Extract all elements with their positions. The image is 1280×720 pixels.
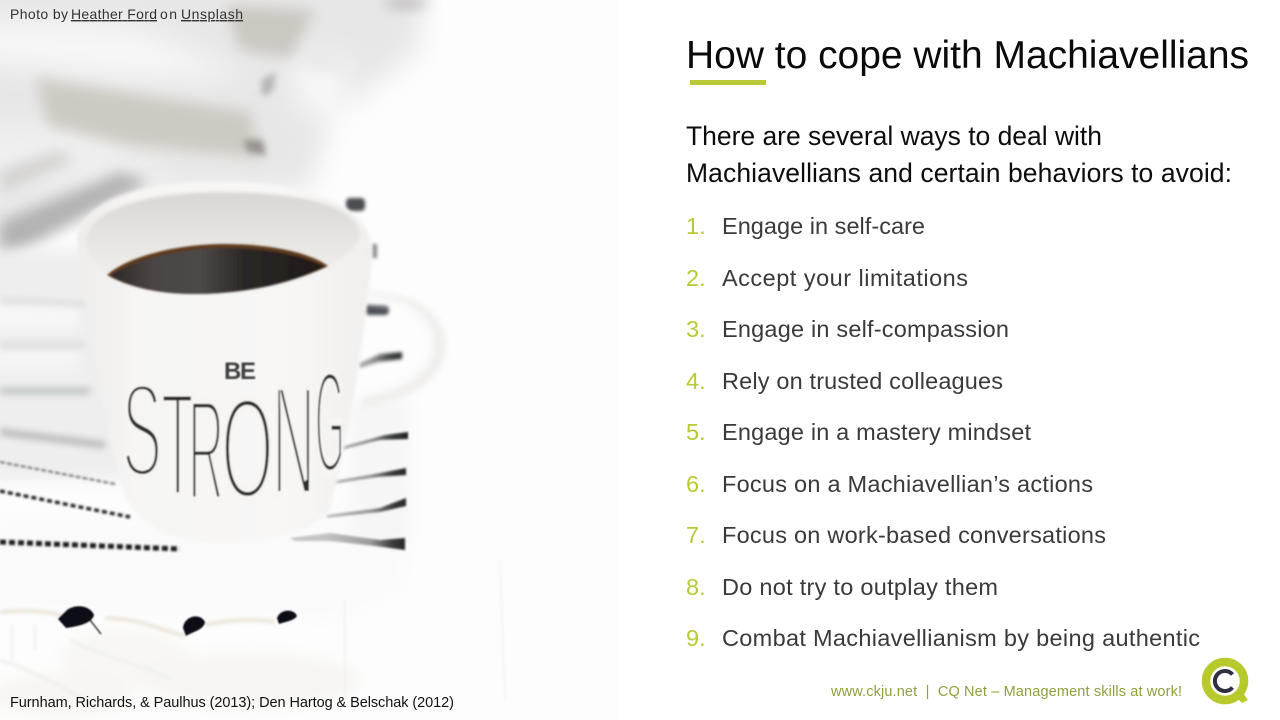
mug lettering: BE: [224, 358, 256, 385]
item 1: Engage in self-care: [722, 213, 925, 239]
table board lines: [345, 560, 505, 700]
intro text: [686, 121, 1232, 188]
photo credit: Unsplash: [181, 6, 243, 22]
item 7: 7.: [686, 522, 706, 548]
mug lettering: O: [221, 368, 274, 529]
item 8: 8.: [686, 574, 706, 600]
title: How to cope with Machiavellians: [686, 34, 1249, 77]
item 8: Do not try to outplay them: [722, 574, 998, 600]
item 5: Engage in a mastery mindset: [722, 419, 1031, 445]
item 2: 2.: [686, 265, 706, 291]
item 5: 5.: [686, 419, 706, 445]
item 6: 6.: [686, 471, 706, 497]
mug lettering: G: [315, 342, 345, 503]
item 2: Accept your limitations: [722, 265, 968, 291]
item 1: 1.: [686, 213, 706, 239]
striped knit cloth under mug: [0, 195, 410, 554]
item 9: 9.: [686, 625, 706, 651]
photo credit: [10, 6, 243, 22]
mug lettering: S: [122, 356, 162, 504]
coffee: [107, 244, 328, 294]
photo credit: Heather Ford: [71, 6, 157, 22]
photo credit: Photo by: [10, 6, 68, 22]
item 4: 4.: [686, 368, 706, 394]
intro text: There are several ways to deal with: [686, 121, 1102, 151]
mug handle: [362, 298, 440, 402]
mug lettering: T: [161, 361, 195, 528]
item 9: Combat Machiavellianism by being authentic: [722, 625, 1200, 651]
item 6: Focus on a Machiavellian’s actions: [722, 471, 1093, 497]
panel: coffee mug photo: [0, 0, 447, 716]
item 3: Engage in self-compassion: [722, 316, 1009, 342]
mug: [77, 182, 372, 542]
logo: CQ Net: [1206, 662, 1248, 703]
mug lettering: [126, 361, 342, 498]
footer tagline: www.ckju.net | CQ Net – Management skills at work!: [830, 684, 1182, 700]
fringe and tassels: [0, 605, 352, 713]
blurred cloth in background: [0, 0, 433, 255]
mug lettering: N: [272, 354, 315, 529]
mug lettering: R: [188, 369, 224, 531]
item 7: Focus on work-based conversations: [722, 522, 1106, 548]
photo credit: on: [160, 6, 177, 22]
item 4: Rely on trusted colleagues: [722, 368, 1003, 394]
source citation: Furnham, Richards, & Paulhus (2013); Den Hartog & Belschak (2012): [10, 695, 454, 711]
numbered list: [686, 213, 1200, 651]
item 3: 3.: [686, 316, 706, 342]
intro text: Machiavellians and certain behaviors to avoid:: [686, 158, 1232, 188]
title underline: [690, 80, 766, 85]
